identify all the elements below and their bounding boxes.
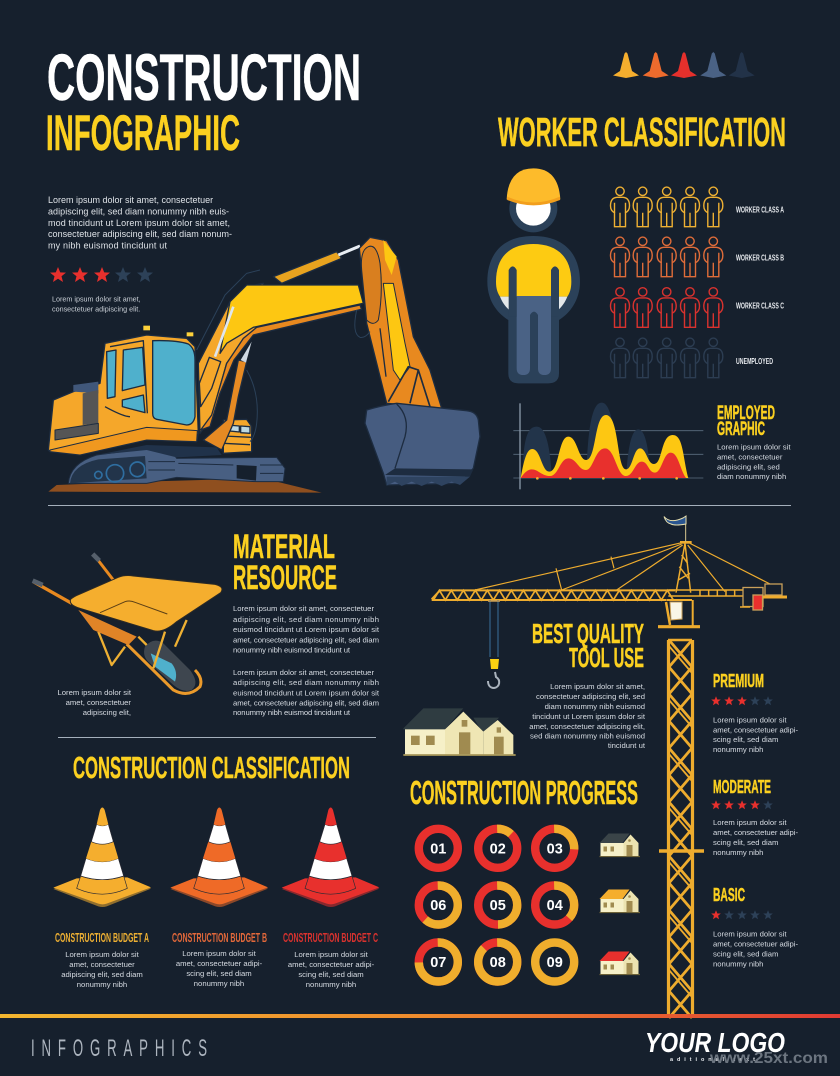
employed graphic text: adipiscing elit, sed: [717, 462, 780, 472]
worker class labels: WORKER CLASS B: [736, 252, 784, 262]
progress donuts: [419, 829, 574, 982]
premium rating: Lorem ipsum dolor sit: [713, 716, 787, 724]
intro text: [48, 195, 232, 250]
material text: euismod tincidunt ut Lorem ipsum dolor sit: [233, 688, 380, 698]
moderate rating: scing elit, sed diam: [713, 838, 778, 847]
moderate rating: nonummy nibh: [713, 848, 763, 857]
excavator: [48, 237, 480, 493]
budget B: amet, consectetuer adipi-: [176, 959, 263, 968]
basic rating: [711, 885, 798, 968]
tool use text: Lorem ipsum dolor sit amet,: [550, 682, 645, 691]
footer band: [0, 1014, 840, 1018]
small cones row: [613, 52, 755, 78]
premium rating: amet, consectetuer adipi-: [713, 726, 798, 734]
boom: [197, 246, 363, 433]
budget A: amet, consectetuer: [69, 960, 135, 969]
tool use text: diam nonummy nibh euismod: [545, 702, 645, 711]
donut 07: [419, 942, 458, 982]
crane jib and cables: [432, 517, 770, 600]
premium rating: [711, 671, 798, 754]
budget C: amet, consectetuer adipi-: [288, 960, 375, 969]
budget B: [172, 930, 267, 988]
employed graphic text: EMPLOYED: [717, 403, 775, 424]
donut 03: 03: [547, 842, 563, 858]
donut 08: 08: [490, 955, 506, 971]
wheelbarrow caption: Lorem ipsum dolor sit: [58, 688, 132, 697]
donut 06: [419, 886, 458, 924]
cab: [48, 326, 198, 455]
budget B: nonummy nibh: [194, 979, 244, 988]
worker class labels: UNEMPLOYED: [736, 356, 773, 366]
small caption: consectetuer adipiscing elit.: [52, 304, 140, 314]
donut 04: [535, 886, 574, 924]
footer label: INFOGRAPHICS: [31, 1035, 207, 1062]
budget C: scing elit, sed diam: [298, 970, 364, 979]
donut 04: 04: [547, 898, 563, 914]
basic rating: BASIC: [713, 885, 745, 905]
basic rating: Lorem ipsum dolor sit: [713, 930, 787, 938]
moderate rating: MODERATE: [713, 777, 771, 797]
crane cab: [670, 602, 682, 620]
material text: amet, consectetuer adipiscing elit, sed diam: [233, 698, 379, 708]
material text: adipiscing elit, sed diam nonummy nibh: [233, 615, 379, 624]
worker class labels: WORKER CLASS A: [736, 204, 784, 214]
tracks: [68, 445, 285, 483]
area chart: [513, 403, 703, 489]
small caption: Lorem ipsum dolor sit amet,: [52, 294, 141, 304]
donut 02: [478, 829, 517, 868]
premium rating: scing elit, sed diam: [713, 735, 778, 744]
wheelbarrow: [33, 554, 222, 693]
donut 05: [478, 886, 517, 924]
material text: [233, 604, 380, 717]
heading: best quality tool use: TOOL USE: [569, 642, 644, 673]
budget C: CONSTRUCTION BUDGET C: [283, 930, 378, 945]
donut 01: [419, 829, 458, 868]
employed graphic text: [717, 403, 791, 481]
premium rating: nonummy nibh: [713, 745, 763, 754]
budget A: nonummy nibh: [77, 980, 127, 989]
material text: nonummy nibh euismod tincidunt ut: [233, 646, 351, 654]
moderate rating: [711, 777, 798, 857]
budget B: scing elit, sed diam: [186, 969, 252, 978]
heading: best quality tool use: BEST QUALITY: [532, 618, 644, 649]
basic rating: nonummy nibh: [713, 960, 763, 968]
donut 01: 01: [430, 842, 446, 858]
material text: nonummy nibh euismod tincidunt ut: [233, 708, 351, 717]
budget A: [55, 930, 149, 989]
budget C: [283, 930, 378, 989]
intro text: adipiscing elit, sed diam nonummy nibh euis-: [48, 206, 229, 216]
budget A: CONSTRUCTION BUDGET A: [55, 930, 149, 945]
crane tower: [658, 600, 704, 1018]
tool use text: [529, 682, 646, 750]
employed graphic text: GRAPHIC: [717, 419, 765, 440]
crane flag: [664, 516, 686, 525]
counterweight: [740, 584, 787, 610]
donut 08: [478, 942, 517, 982]
wheelbarrow caption: [58, 688, 132, 717]
logo: YOUR LOGO: [645, 1027, 785, 1058]
heading: best quality tool use: [532, 618, 644, 673]
title: CONSTRUCTION: [47, 40, 361, 114]
intro text: consectetuer adipiscing elit, sed diam nonum-: [48, 229, 232, 239]
material text: amet, consectetuer adipiscing elit, sed diam: [233, 636, 379, 644]
unemployed icons: [610, 338, 723, 378]
icon: house red roof: [600, 952, 640, 974]
worker class B icons: [610, 237, 723, 277]
icon: house grey roof: [600, 834, 640, 856]
worker class C icons: [610, 288, 723, 327]
moderate rating: amet, consectetuer adipi-: [713, 828, 798, 837]
intro text: my nibh euismod tincidunt ut: [48, 240, 167, 250]
worker class labels: WORKER CLASS C: [736, 300, 784, 310]
bucket: [365, 403, 480, 486]
budget A: Lorem ipsum dolor sit: [65, 950, 140, 959]
employed graphic text: diam nonummy nibh: [717, 472, 786, 481]
employed graphic text: amet, consectetuer: [717, 452, 783, 462]
basic rating: scing elit, sed diam: [713, 950, 778, 958]
tool use text: tincidunt ut Lorem ipsum dolor sit: [532, 712, 646, 721]
hook: [488, 600, 500, 688]
heading: material resource: MATERIAL: [233, 528, 335, 566]
budget B: CONSTRUCTION BUDGET B: [172, 930, 267, 945]
wheelbarrow caption: adipiscing elit,: [83, 708, 131, 717]
moderate rating: Lorem ipsum dolor sit: [713, 818, 787, 827]
budget C: nonummy nibh: [306, 980, 356, 989]
basic rating: amet, consectetuer adipi-: [713, 940, 798, 948]
title: INFOGRAPHIC: [46, 105, 240, 161]
front attachments: [203, 342, 257, 453]
donut 02: 02: [490, 842, 506, 858]
donut 05: 05: [490, 898, 506, 914]
traffic cones: [53, 807, 379, 907]
small caption: [52, 294, 141, 314]
ground: [48, 478, 322, 493]
tool use text: consectetuer adipiscing elit, sed: [536, 692, 645, 701]
worker figure: [487, 168, 580, 383]
material text: Lorem ipsum dolor sit amet, consectetuer: [233, 604, 374, 613]
tool use text: tincidunt ut: [608, 741, 646, 750]
logo: aditional text: [670, 1057, 755, 1063]
arm: [355, 237, 442, 408]
title: [46, 40, 361, 161]
premium rating: PREMIUM: [713, 671, 764, 691]
employed graphic text: Lorem ipsum dolor sit: [717, 442, 791, 452]
worker class labels: [736, 204, 784, 366]
donut 09: [535, 942, 574, 982]
pictogram rows: [610, 187, 723, 378]
worker class A icons: [610, 187, 723, 227]
tool use text: sed diam nonummy nibh euismod: [530, 732, 645, 740]
material text: Lorem ipsum dolor sit amet, consectetuer: [233, 668, 374, 677]
material text: euismod tincidunt ut Lorem ipsum dolor sit: [233, 625, 380, 634]
donut 09: 09: [547, 955, 563, 971]
heading: material resource: RESOURCE: [233, 559, 337, 597]
donut 07: 07: [430, 955, 446, 971]
tower crane: [432, 516, 787, 1018]
heading: construction classification: CONSTRUCTION CLASSIFICATION: [73, 750, 350, 785]
intro text: mod tincidunt ut Lorem ipsum dolor sit amet,: [48, 218, 230, 228]
tool use text: amet, consectetuer adipiscing elit,: [529, 722, 645, 731]
watermark: www.25xt.com: [709, 1050, 828, 1067]
budget C: Lorem ipsum dolor sit: [294, 950, 369, 959]
donut 06: 06: [430, 898, 446, 914]
intro text: Lorem ipsum dolor sit amet, consectetuer: [48, 195, 213, 205]
budget A: adipiscing elit, sed diam: [61, 970, 143, 979]
icon: house yellow roof: [600, 890, 640, 912]
rating stars: [50, 267, 153, 282]
material text: adipiscing elit, sed diam nonummy nibh: [233, 678, 379, 687]
wheelbarrow caption: amet, consectetuer: [66, 698, 131, 707]
houses illustration: [403, 708, 516, 755]
donut 03: [535, 829, 574, 868]
heading: material resource: [233, 528, 337, 597]
budget B: Lorem ipsum dolor sit: [182, 949, 257, 958]
